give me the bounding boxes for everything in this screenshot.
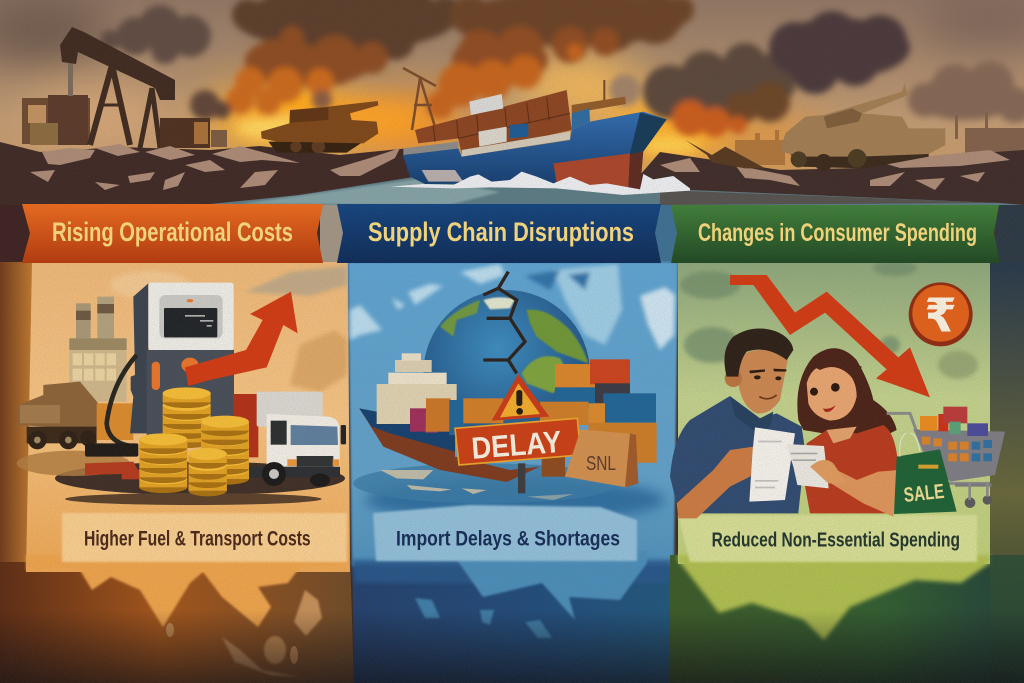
- icon: oil pump jack: [22, 27, 227, 148]
- heading banner: supply chain disruptions: Supply Chain Disruptions: [368, 217, 634, 247]
- icon: rupee coin: ₹: [924, 290, 957, 344]
- caption: import delays and shortages: Import Delays & Shortages: [396, 527, 620, 550]
- icon: cargo ship deck: [359, 353, 540, 482]
- icon: sale bag: [894, 433, 957, 514]
- icon: delay sign: DELAY: [470, 425, 563, 466]
- bottom map: right continents: [678, 555, 1024, 683]
- bottom vignette: [0, 610, 1024, 683]
- icon: signpost: [518, 463, 525, 493]
- icon: truck: [233, 392, 346, 487]
- icon: military truck: [18, 382, 98, 449]
- rubble chips: [30, 144, 1010, 190]
- heading banner: supply chain disruptions: [337, 204, 661, 263]
- icon: shopping cart: [887, 407, 1005, 508]
- icon: coin stacks: [139, 387, 249, 496]
- icon: rising red arrow: [185, 292, 298, 386]
- icon: rupee coin: [909, 282, 973, 346]
- illustration: fuel, coins and truck: [17, 283, 346, 550]
- panel: left background: [0, 262, 354, 683]
- illustration: couple, falling arrow and cart: [670, 275, 1005, 551]
- icon: warning triangle: [492, 374, 549, 421]
- bottom map: left continents: [26, 555, 345, 677]
- panel: middle background: [348, 262, 678, 683]
- icon: cracked globe: [423, 272, 590, 457]
- figure: man: [670, 328, 847, 518]
- ground shadow: [55, 462, 345, 495]
- caption: higher fuel and transport costs: Higher Fuel & Transport Costs: [84, 527, 311, 550]
- smoke clouds: [100, 0, 1024, 137]
- silhouette factories: [735, 130, 785, 165]
- world map blotches: [350, 264, 675, 350]
- heading banner: changes in consumer spending: [671, 205, 1000, 263]
- caption: reduced non-essential spending: Reduced Non-Essential Spending: [712, 529, 960, 551]
- reflections on water: [380, 470, 573, 500]
- heading banner: rising operational costs: [22, 204, 323, 263]
- panel: right background: [670, 260, 1024, 683]
- icon: factory: [69, 297, 127, 402]
- figure: woman: [797, 348, 898, 517]
- backing colours between banners: [0, 205, 30, 265]
- fire glow: [0, 0, 1024, 160]
- heading banner: rising operational costs: Rising Operational Costs: [52, 217, 293, 247]
- bottom map: middle continents: [352, 550, 672, 638]
- rubble ground: [0, 142, 425, 205]
- icon: cardboard box: [565, 429, 638, 487]
- icon: cardboard box: SNL: [586, 453, 616, 475]
- icon: falling red arrow: [730, 275, 930, 397]
- icon: left tank: [261, 101, 378, 153]
- smoke body fills: [235, 0, 455, 50]
- water: [200, 176, 1024, 205]
- icon: sale bag: SALE: [903, 480, 945, 507]
- background oil derrick: [403, 68, 436, 130]
- illustration: globe, ship and delay sign: [353, 272, 657, 550]
- icon: cargo ship: [390, 80, 690, 195]
- icon: fuel pump: [85, 283, 234, 479]
- icon: right armoured vehicle: [685, 83, 945, 171]
- icon: container stacks: [540, 359, 657, 477]
